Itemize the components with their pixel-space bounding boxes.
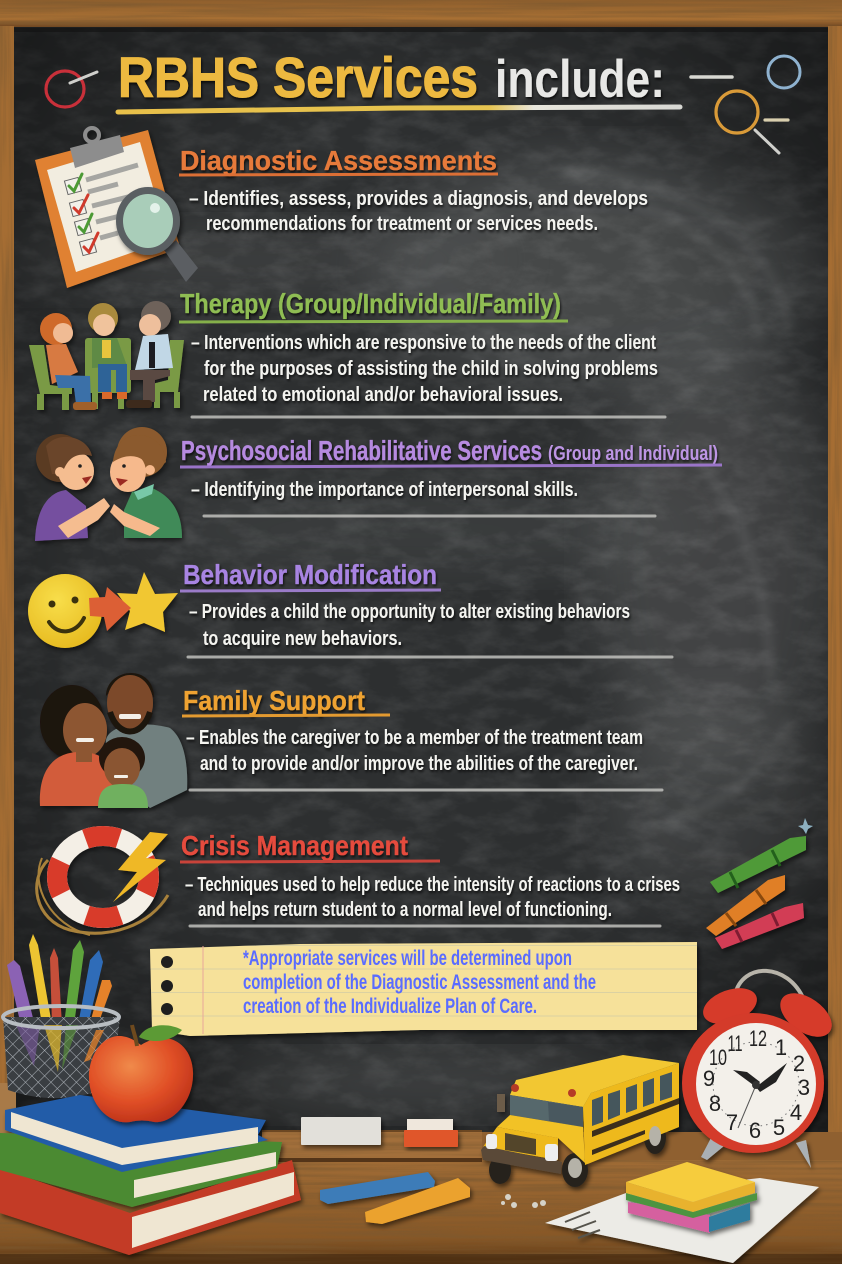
text: Diagnostic Assessments description bbox=[189, 188, 648, 235]
icon: stacked books bbox=[0, 1095, 301, 1255]
clock numerals: 6 bbox=[749, 1118, 761, 1143]
note text: creation of the Individualize Plan of Care. bbox=[243, 995, 537, 1018]
icon: therapy group in chairs bbox=[29, 301, 184, 410]
icon: school bus bbox=[481, 1055, 679, 1187]
icon: red alarm clock bbox=[682, 971, 840, 1168]
text: Therapy description: for the purposes of assisting the child in solving problems bbox=[204, 358, 658, 380]
text: Crisis Management description bbox=[185, 874, 680, 921]
clock numerals: 2 bbox=[793, 1051, 805, 1076]
icon: smiley, arrow, star bbox=[28, 572, 178, 648]
clock numerals: 10 bbox=[709, 1045, 727, 1070]
clock numerals: 5 bbox=[773, 1115, 785, 1140]
note text: completion of the Diagnostic Assessment and the bbox=[243, 971, 596, 994]
icon: red apple bbox=[89, 1025, 193, 1122]
heading: Family Support: Family Support bbox=[183, 685, 365, 716]
text: Behavior Modification description: to acquire new behaviors. bbox=[203, 628, 402, 650]
text: Behavior Modification description: – Provides a child the opportunity to alter existing behaviors bbox=[189, 601, 630, 623]
text: Behavior Modification description bbox=[189, 601, 630, 650]
doodles: top-right chalk marks bbox=[691, 56, 800, 153]
heading: Therapy: Therapy (Group/Individual/Family) bbox=[180, 288, 561, 319]
heading: Psychosocial Rehabilitative Services: Psychosocial Rehabilitative Services bbox=[181, 435, 542, 466]
heading: Crisis Management: Crisis Management bbox=[181, 830, 408, 861]
clock numerals: 8 bbox=[709, 1091, 721, 1116]
text: Therapy description: related to emotional and/or behavioral issues. bbox=[203, 384, 563, 406]
text: Diagnostic Assessments description: – Identifies, assess, provides a diagnosis, and develops bbox=[189, 188, 648, 210]
icon: family portrait bbox=[40, 673, 187, 808]
clock numerals: 9 bbox=[703, 1066, 715, 1091]
icon: two children talking bbox=[35, 427, 182, 541]
note text: *Appropriate services will be determined upon bbox=[243, 947, 572, 970]
text: Crisis Management description: – Techniques used to help reduce the intensity of reactions to a crises bbox=[185, 874, 680, 896]
icon: pencil cup bbox=[3, 934, 120, 1098]
clock numerals: 1 bbox=[775, 1035, 787, 1060]
panel: yellow note paper bbox=[150, 942, 697, 1036]
clock numerals: 7 bbox=[726, 1110, 738, 1135]
heading: Behavior Modification: Behavior Modification bbox=[183, 559, 437, 590]
text: Therapy description: – Interventions which are responsive to the needs of the client bbox=[191, 332, 656, 354]
title: RBHS Services bbox=[118, 46, 478, 110]
clock numerals: 12 bbox=[749, 1026, 767, 1051]
text: Psychosocial description: – Identifying the importance of interpersonal skills. bbox=[191, 479, 578, 501]
icon: stacked sticky sponges bbox=[626, 1162, 757, 1233]
icon: life ring and lightning bolt bbox=[37, 832, 168, 935]
icon: blue chalk bbox=[320, 1172, 435, 1204]
chalk tray bbox=[262, 1130, 482, 1162]
book: green bbox=[0, 1133, 282, 1207]
adult right bbox=[126, 301, 173, 408]
text: Family Support description: and to provide and/or improve the abilities of the caregiver. bbox=[200, 753, 638, 775]
clock numerals: 4 bbox=[790, 1100, 802, 1125]
heading: Psychosocial Rehabilitative Services: (Group and Individual) bbox=[548, 443, 718, 465]
text: Family Support description bbox=[186, 727, 643, 775]
book: blue bbox=[5, 1095, 268, 1172]
text: Therapy description bbox=[191, 332, 658, 406]
wooden table bbox=[0, 1132, 842, 1264]
icon: crayons bbox=[706, 818, 813, 949]
boy left bbox=[40, 313, 97, 410]
icon: clipboard and magnifier bbox=[35, 128, 198, 288]
child centre bbox=[88, 303, 127, 399]
title: include: bbox=[495, 50, 665, 109]
doodle: red chalk circle bbox=[46, 71, 97, 107]
text: Diagnostic Assessments description: recommendations for treatment or services needs. bbox=[206, 213, 598, 235]
clock numerals bbox=[703, 1026, 810, 1143]
text: Crisis Management description: and helps return student to a normal level of functioning. bbox=[198, 899, 612, 921]
clock numerals: 3 bbox=[798, 1075, 810, 1100]
title underline bbox=[118, 107, 680, 112]
icon: sheet of paper bbox=[545, 1178, 819, 1263]
chalk crumbs bbox=[501, 1194, 546, 1208]
text: Family Support description: – Enables the caregiver to be a member of the treatment team bbox=[186, 727, 643, 749]
clock numerals: 11 bbox=[728, 1031, 742, 1056]
icon: erasers on tray bbox=[301, 1117, 458, 1147]
icon: orange chalk bbox=[365, 1178, 470, 1224]
book: red bbox=[0, 1160, 301, 1255]
note text bbox=[243, 947, 596, 1018]
heading: Diagnostic Assessments: Diagnostic Assessments bbox=[180, 145, 497, 176]
